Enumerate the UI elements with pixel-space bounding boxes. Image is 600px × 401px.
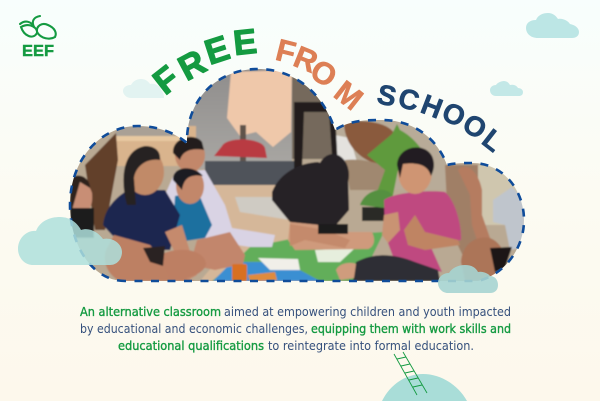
title word: FREE: R [172, 42, 213, 89]
person: boy in pink [384, 191, 461, 272]
description text: aimed at empowering children and youth impacted [224, 305, 511, 319]
stool [294, 102, 338, 170]
title word: FREE: E [231, 22, 259, 63]
logo mark [20, 16, 56, 39]
plant [366, 124, 420, 197]
title word: SCHOOL: C [395, 82, 423, 117]
person: older boy in white [165, 170, 275, 247]
floor mat [201, 184, 290, 281]
title word: FROM: R [289, 39, 323, 80]
title word: SCHOOL: S [375, 78, 399, 113]
items on mat [232, 264, 247, 281]
description text: equipping them with work skills and [311, 322, 511, 336]
description text: to reintegrate into formal education. [268, 339, 474, 353]
title word: FROM: F [272, 32, 299, 71]
curtain [227, 70, 292, 147]
pole and basin [239, 124, 247, 162]
dashed cloud frame [70, 69, 524, 281]
person: right boy [458, 167, 490, 243]
tree and rock [85, 133, 118, 230]
description text: An alternative classroom [80, 305, 221, 319]
cloud: pale by heading [123, 79, 164, 98]
title word: SCHOOL: O [437, 96, 470, 133]
title word: FREE: F [146, 58, 187, 102]
cloud: top right [526, 13, 579, 38]
title: FREE FROM SCHOOL [146, 22, 509, 158]
description text [80, 305, 511, 353]
logo: EEF [20, 16, 56, 60]
cloud: right overlapping photo [438, 265, 498, 293]
title word: FREE [146, 22, 259, 102]
title word: FREE: E [200, 28, 234, 73]
logo wordmark: EEF [22, 43, 54, 60]
cloud: upper middle right [490, 81, 523, 96]
title word: FROM [272, 32, 370, 117]
title word: SCHOOL: H [417, 88, 447, 125]
person: girl in navy [103, 190, 180, 250]
title word: FROM: M [328, 74, 370, 117]
person: boy in blue [172, 192, 212, 243]
title word: SCHOOL [375, 78, 509, 158]
description text: educational qualifications [118, 339, 264, 353]
person: writing boy [272, 162, 349, 232]
title word: FROM: O [305, 52, 343, 95]
hill at bottom [382, 374, 467, 401]
photo backdrop [70, 69, 517, 281]
icon: ladder [394, 352, 427, 395]
title word: SCHOOL: L [476, 123, 509, 158]
photo in cloud frame [70, 69, 524, 281]
cloud: left overlapping photo [18, 217, 122, 265]
title word: SCHOOL: O [457, 108, 492, 145]
person: left girl [72, 182, 94, 209]
description text: by educational and economic challenges, [80, 322, 308, 336]
